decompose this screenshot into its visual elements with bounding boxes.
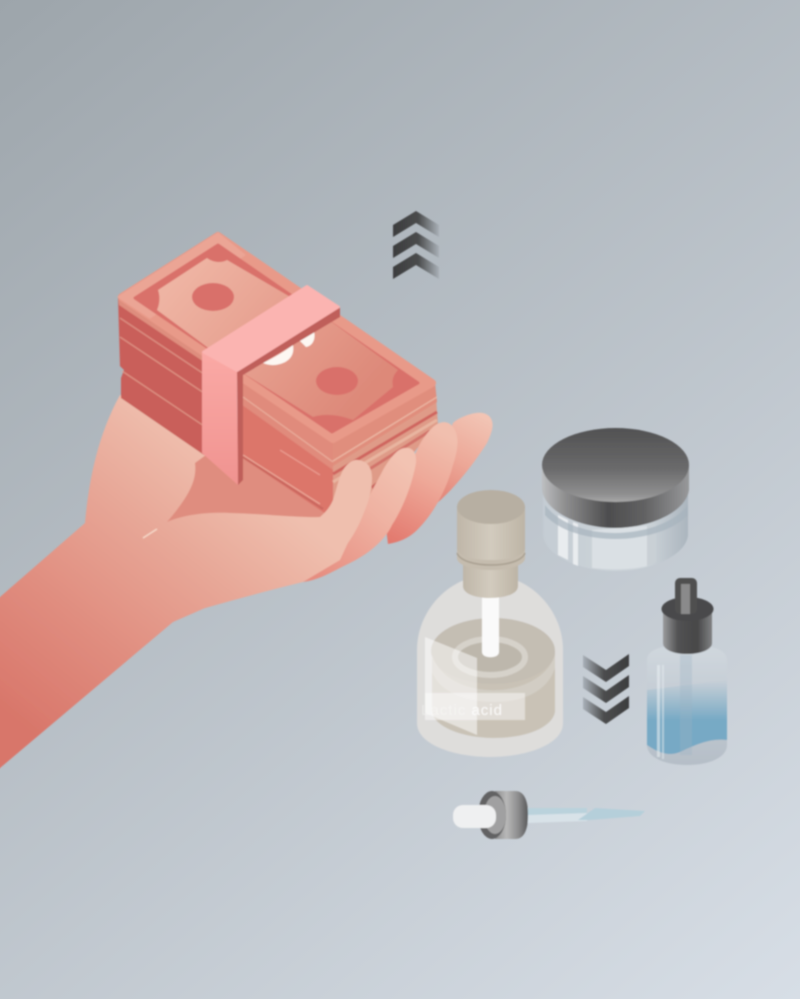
middle finger: [303, 448, 416, 582]
nozzle cap: [663, 612, 712, 654]
jar body: [543, 475, 688, 571]
little finger: [430, 413, 493, 503]
stack left side: [118, 297, 204, 455]
liquid: [432, 650, 555, 738]
bill emblem: [192, 283, 234, 311]
white gap under band: [263, 331, 315, 365]
paper band: [202, 286, 340, 485]
jar lid: [542, 465, 689, 528]
rubber bulb: [453, 805, 496, 828]
neck: [463, 560, 518, 598]
dropper: [453, 791, 645, 839]
far fingers: [303, 413, 493, 582]
stack short side: [333, 383, 438, 522]
crease: [143, 529, 157, 538]
shadow under lid: [545, 505, 688, 539]
dropper collar: [495, 791, 528, 839]
dropper tube: [528, 808, 587, 823]
white tube: [482, 590, 499, 657]
ring: [457, 548, 525, 570]
arrows down: [583, 654, 629, 724]
artwork: [0, 211, 727, 839]
bill emblem: [316, 367, 358, 395]
top bill: [118, 233, 432, 439]
stack long side: [238, 370, 333, 520]
label strip: [425, 693, 525, 720]
glass label: [425, 637, 477, 735]
jar: [542, 428, 689, 571]
labelled bottle: [417, 490, 563, 757]
serum glass: [647, 645, 727, 765]
thumb: [120, 460, 372, 622]
hand palm and arm: [0, 395, 353, 778]
serum bottle: [647, 578, 727, 765]
arrows up: [393, 211, 439, 279]
highlights: [657, 655, 692, 759]
glass body: [417, 575, 563, 757]
label text: Lactic acid: [421, 702, 503, 719]
ring finger: [385, 422, 458, 544]
money stack: [118, 233, 438, 522]
serum liquid: [647, 680, 727, 754]
cap: [457, 507, 525, 560]
